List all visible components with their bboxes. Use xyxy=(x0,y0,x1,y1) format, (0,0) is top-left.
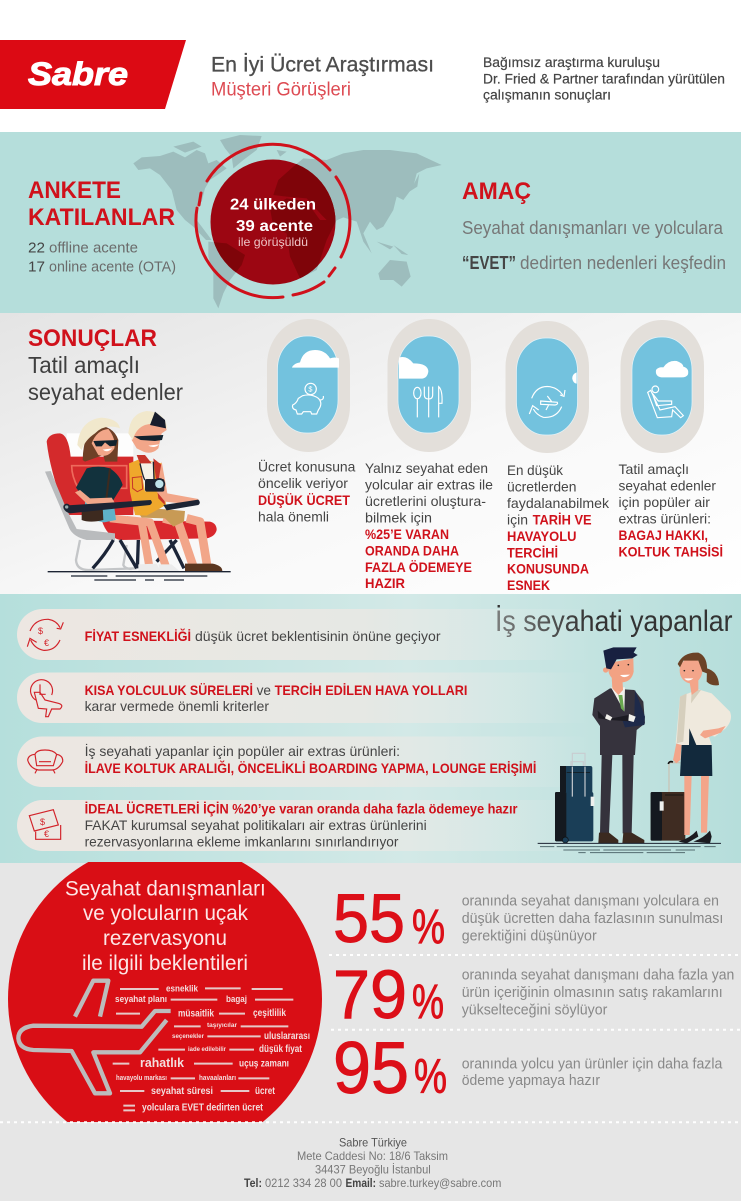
panel: expectations and statistics xyxy=(0,842,741,1201)
text: solo travellers: ORANDA DAHA xyxy=(365,542,459,558)
text: solo travellers: Yalnız seyahat eden xyxy=(365,460,488,476)
stat: 55 percent: 55 xyxy=(333,880,405,957)
stat: 95 percent xyxy=(333,1028,723,1109)
woman's legs xyxy=(110,518,166,567)
stat: 79 percent xyxy=(333,956,734,1033)
stat: 55 percent: düşük ücretten daha fazlasının sunulması xyxy=(462,910,723,927)
word cloud: rahatlık xyxy=(140,1055,185,1070)
text: lowest fares: ücretlerden xyxy=(507,478,576,494)
stat: 79 percent: % xyxy=(412,976,444,1029)
footer contact: Tel: xyxy=(244,1176,262,1190)
row: price flexibility: düşük ücret beklentisinin önüne geçiyor xyxy=(195,628,441,644)
text: low fare: DÜŞÜK ÜCRET xyxy=(258,492,350,508)
text: low fare: Ücret konusuna xyxy=(258,458,356,474)
footer contact: Email: xyxy=(346,1176,376,1190)
word cloud: seçenekler xyxy=(172,1033,204,1040)
row: journey time and airlines: TERCİH EDİLEN HAVA YOLLARI xyxy=(275,682,467,698)
illustration: couple in plane seats xyxy=(45,411,231,580)
window: popular extras xyxy=(620,320,704,453)
word cloud: uçuş zamanı xyxy=(239,1058,289,1070)
footer contact xyxy=(244,1136,501,1190)
footer contact: Sabre Türkiye xyxy=(339,1136,407,1150)
heading: purpose: AMAÇ xyxy=(462,178,531,205)
stat: 79 percent: yükselteceğini söylüyor xyxy=(462,1001,607,1018)
dashes xyxy=(113,988,293,1110)
man's legs xyxy=(163,518,207,567)
word cloud: seyahat planı xyxy=(115,994,167,1004)
stat: 95 percent: 95 xyxy=(333,1028,409,1109)
row: price flexibility: € xyxy=(44,638,49,648)
text: lowest fares: En düşük xyxy=(507,462,564,478)
row: popular air extras xyxy=(17,736,617,787)
title: En İyi Ücret Araştırması xyxy=(211,54,434,76)
row: journey time and airlines: ve xyxy=(257,682,271,698)
stat: 55 percent: oranında seyahat danışmanı yolculara en xyxy=(462,892,719,910)
window: low fare xyxy=(267,319,350,452)
circle text: 39 acente xyxy=(236,218,313,235)
study note: çalışmanın sonuçları xyxy=(483,88,611,102)
circle heading: ile ilgili beklentileri xyxy=(82,952,248,975)
airplane windows with icons xyxy=(267,319,704,453)
circle text xyxy=(230,196,316,249)
text: solo travellers: FAZLA ÖDEMEYE xyxy=(365,559,472,575)
word cloud: bagaj xyxy=(226,994,247,1004)
panel: business travellers xyxy=(0,594,741,863)
text: lowest fares: faydalanabilmek xyxy=(507,495,610,511)
dotted dividers xyxy=(0,955,741,1122)
row: price flexibility: FİYAT ESNEKLİĞİ xyxy=(85,627,191,644)
participants breakdown: 17 xyxy=(28,258,45,276)
word cloud: uluslararası xyxy=(264,1031,310,1042)
footer contact: 0212 334 28 00 xyxy=(265,1176,342,1190)
word cloud: havaalanları xyxy=(199,1075,236,1082)
window: low fare: $ xyxy=(308,385,312,394)
stat: 79 percent: 79 xyxy=(333,956,407,1033)
word cloud: düşük fiyat xyxy=(259,1044,303,1055)
text: solo travellers xyxy=(365,460,493,591)
icon: plane outline xyxy=(18,981,171,1093)
word cloud: çeşitlilik xyxy=(253,1008,286,1019)
header xyxy=(0,40,725,109)
purpose text: dedirten nedenleri keşfedin xyxy=(520,253,726,273)
stat: 55 percent: gerektiğini düşünüyor xyxy=(462,928,597,944)
heading: results: seyahat edenler xyxy=(28,379,183,405)
heading: results: Tatil amaçlı xyxy=(28,352,140,378)
purpose text: “EVET” xyxy=(462,253,516,273)
text: lowest fares xyxy=(507,462,610,593)
text: solo travellers: HAZIR xyxy=(365,575,405,591)
text: solo travellers: %25’E VARAN xyxy=(365,526,449,542)
row: willingness to pay: $ xyxy=(40,817,45,827)
circle text: ile görüşüldü xyxy=(238,235,308,249)
purpose text: Seyahat danışmanları ve yolculara xyxy=(462,218,724,238)
logo banner xyxy=(0,40,186,109)
row: willingness to pay: İDEAL ÜCRETLERİ İÇİN %20’ye varan oranda daha fazla ödemeye hazır xyxy=(85,800,518,816)
text: lowest fares: TARİH VE xyxy=(533,512,592,528)
word cloud: havayolu markası xyxy=(116,1075,167,1082)
participants breakdown: online acente (OTA) xyxy=(49,258,176,276)
heading: results xyxy=(28,325,183,405)
text: popular extras: için popüler air xyxy=(618,494,710,510)
circle heading xyxy=(65,878,266,975)
word cloud xyxy=(115,984,310,1114)
window: meals xyxy=(388,319,471,452)
panel: leisure travellers results xyxy=(0,313,741,594)
text: lowest fares: için xyxy=(507,512,528,528)
illustration: business travellers with luggage xyxy=(538,647,731,853)
study note: Dr. Fried & Partner tarafından yürütülen xyxy=(483,72,725,86)
heading: participants xyxy=(28,177,175,231)
text: popular extras: KOLTUK TAHSİSİ xyxy=(618,544,723,560)
word cloud: müsaitlik xyxy=(178,1008,214,1020)
row: journey time and airlines: KISA YOLCULUK SÜRELERİ xyxy=(85,682,253,698)
circle text: 24 ülkeden xyxy=(230,196,316,214)
text: solo travellers: ücretlerini oluştura- xyxy=(365,493,486,509)
stat: 95 percent: oranında yolcu yan ürünler için daha fazla xyxy=(462,1055,723,1072)
footer contact: Mete Caddesi No: 18/6 Taksim xyxy=(297,1149,448,1163)
text: low fare: öncelik veriyor xyxy=(258,475,348,491)
row: popular air extras: İLAVE KOLTUK ARALIĞI, ÖNCELİKLİ BOARDING YAPMA, LOUNGE ERİŞİMİ xyxy=(85,759,536,776)
row: willingness to pay: rezervasyonlarına ekleme imkanlarını sınırlandırıyor xyxy=(85,834,399,850)
row: price flexibility: $ xyxy=(38,626,43,636)
text: popular extras: extras ürünleri: xyxy=(618,510,711,526)
stat: 55 percent xyxy=(333,880,723,957)
footer contact: 34437 Beyoğlu İstanbul xyxy=(315,1162,431,1176)
text: popular extras: Tatil amaçlı xyxy=(618,461,689,477)
word cloud: seyahat süresi xyxy=(151,1086,213,1097)
word cloud: esneklik xyxy=(166,984,199,994)
heading: participants: KATILANLAR xyxy=(28,204,175,231)
word cloud: yolculara EVET dedirten ücret xyxy=(142,1102,264,1114)
stat: 95 percent: ödeme yapmaya hazır xyxy=(462,1072,600,1089)
purpose text xyxy=(462,218,726,273)
row: price flexibility xyxy=(17,609,617,660)
text: popular extras xyxy=(618,461,723,560)
world map xyxy=(133,135,442,308)
word cloud: ücret xyxy=(255,1086,276,1097)
text: low fare: hala önemli xyxy=(258,508,329,524)
stat: 95 percent: % xyxy=(414,1051,447,1104)
word cloud: taşıyıcılar xyxy=(207,1022,237,1029)
circle heading: ve yolcuların uçak xyxy=(83,902,248,925)
row: journey time and airlines xyxy=(17,672,617,723)
study note: Bağımsız araştırma kuruluşu xyxy=(483,55,660,70)
participants breakdown: offline acente xyxy=(49,240,138,256)
text: solo travellers: bilmek için xyxy=(365,510,432,526)
panel: survey participants and purpose xyxy=(0,132,741,313)
text: lowest fares: ESNEK xyxy=(507,577,550,593)
red circle: airline booking expectations xyxy=(8,862,322,1122)
row: journey time and airlines: karar vermede önemli kriterler xyxy=(85,698,269,714)
title: Müşteri Görüşleri xyxy=(211,80,351,100)
row: popular air extras: İş seyahati yapanlar için popüler air extras ürünleri: xyxy=(85,742,400,759)
stat: 55 percent: % xyxy=(412,901,445,954)
heading: results: SONUÇLAR xyxy=(28,325,157,352)
row: willingness to pay: € xyxy=(44,829,49,839)
text: solo travellers: yolcular air extras ile xyxy=(365,476,493,492)
logo banner: Sabre xyxy=(28,56,128,92)
stat: 79 percent: ürün içeriğinin olmasının satış rakamlarını xyxy=(462,984,723,1001)
participants breakdown xyxy=(28,240,176,276)
row: willingness to pay xyxy=(17,800,617,851)
study note xyxy=(483,55,725,102)
text: lowest fares: TERCİHİ xyxy=(507,544,558,560)
participants breakdown: 22 xyxy=(28,240,45,256)
word cloud: iade edilebilir xyxy=(188,1046,226,1053)
window: flexible dates xyxy=(506,321,589,453)
circle heading: Seyahat danışmanları xyxy=(65,878,266,900)
red circle with ring xyxy=(194,142,352,300)
text: lowest fares: KONUSUNDA xyxy=(507,560,589,576)
text: popular extras: BAGAJ HAKKI, xyxy=(618,527,708,543)
text: low fare xyxy=(258,458,356,524)
footer contact: sabre.turkey@sabre.com xyxy=(379,1176,501,1190)
text: lowest fares: HAVAYOLU xyxy=(507,528,576,544)
circle heading: rezervasyonu xyxy=(103,927,227,950)
heading: participants: ANKETE xyxy=(28,177,121,204)
title xyxy=(211,54,434,100)
text: popular extras: seyahat edenler xyxy=(618,478,716,494)
row: willingness to pay: FAKAT kurumsal seyahat politikaları air extras ürünlerini xyxy=(85,817,427,833)
